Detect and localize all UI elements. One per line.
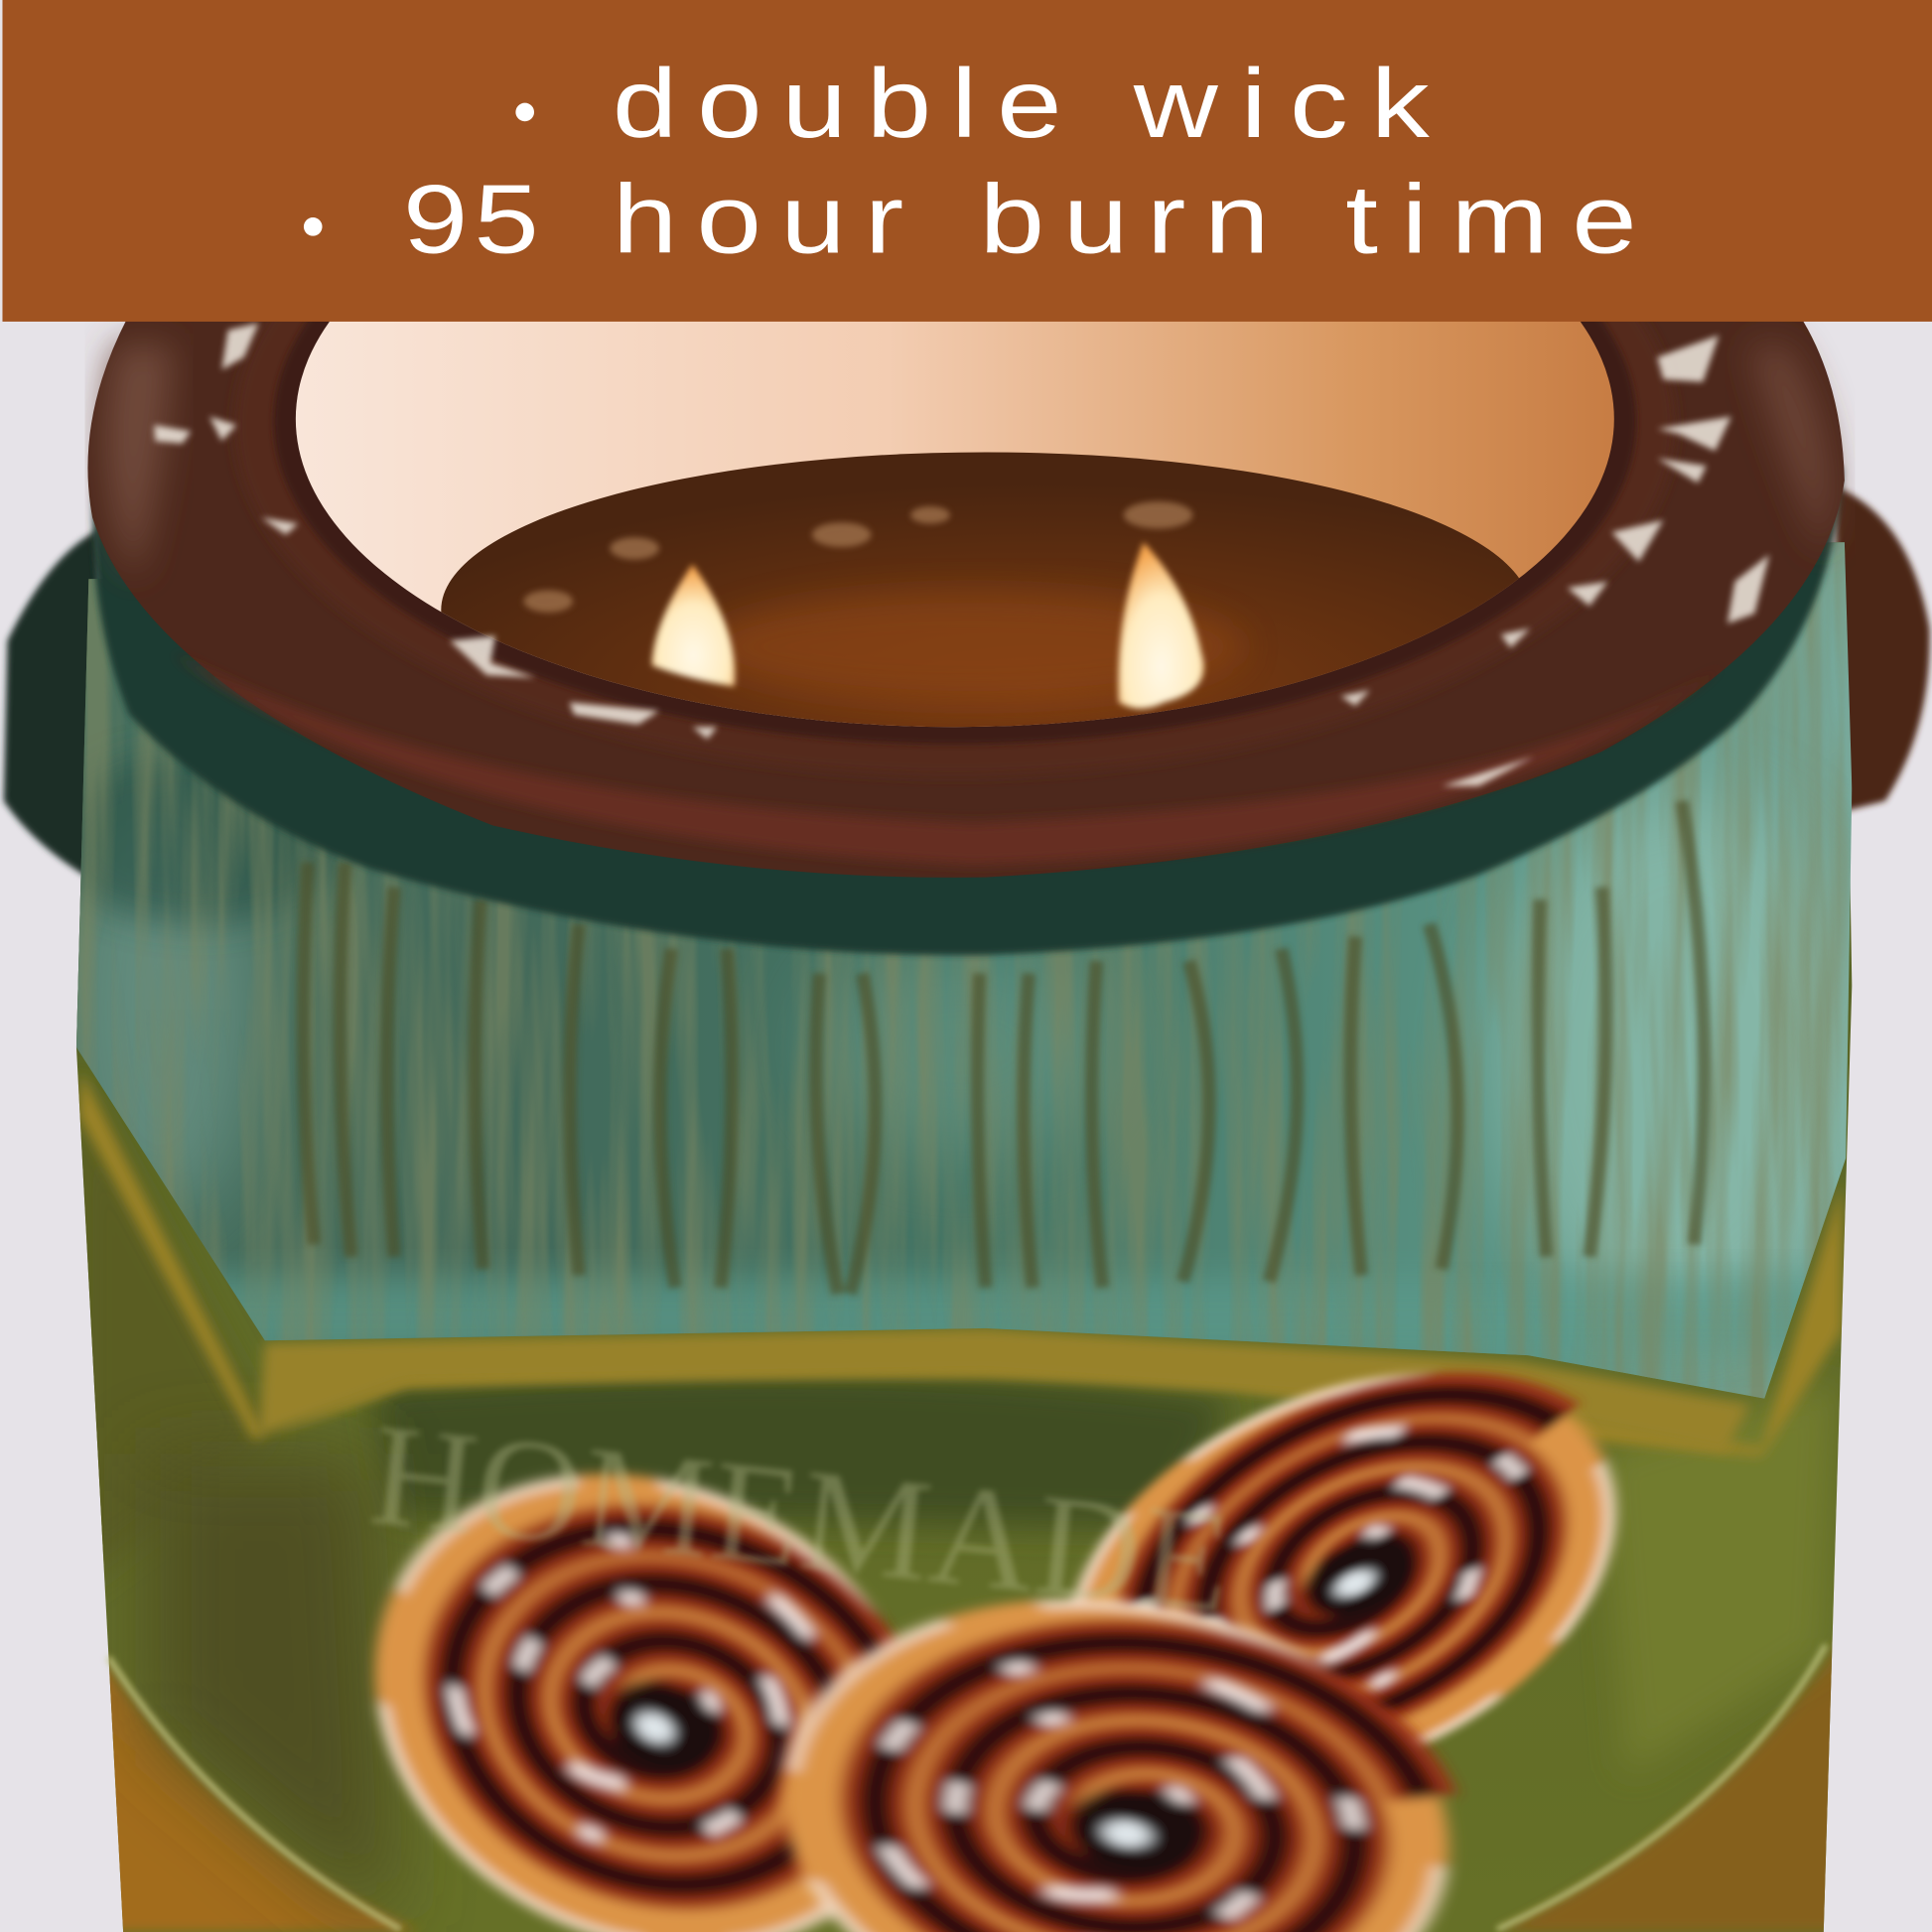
left handle lug bbox=[4, 530, 104, 888]
banner background bbox=[2, 0, 1932, 322]
chipped paint flecks on rim bbox=[154, 323, 1769, 786]
line 1: double wick bbox=[515, 49, 1431, 158]
flame right bbox=[1118, 542, 1204, 709]
vertical wood-like lettering streaks bbox=[303, 801, 1704, 1294]
arc pinstripe bbox=[108, 1645, 1826, 1930]
dark green band under rim bbox=[93, 469, 1842, 955]
line 1: double wick: wick bbox=[1133, 49, 1431, 158]
gold banner edge bbox=[78, 1072, 1842, 1456]
line 1: double wick: double bbox=[613, 49, 1062, 158]
right handle lug bbox=[1836, 486, 1930, 813]
candle opening bbox=[283, 98, 1626, 767]
wax surface bbox=[441, 452, 1530, 767]
rim highlights bbox=[173, 653, 1725, 865]
rim outer ring bbox=[87, 314, 1845, 878]
line 2: 95 hour burn time: 95 bbox=[403, 165, 539, 273]
line 2: 95 hour burn time: hour bbox=[613, 165, 903, 273]
wax bubbles bbox=[523, 501, 1192, 613]
line 2: 95 hour burn time: time bbox=[1345, 165, 1637, 273]
top banner bbox=[2, 0, 1932, 322]
teal label panel bbox=[50, 530, 1872, 1430]
flame left bbox=[652, 564, 735, 686]
can body bbox=[76, 542, 1852, 1932]
line 2: 95 hour burn time: burn bbox=[980, 165, 1270, 273]
line 2: 95 hour burn time bbox=[304, 165, 1637, 273]
faded HOMEMADE lettering: HOMEMADE bbox=[363, 1393, 1238, 1643]
inner wall bbox=[283, 98, 1626, 740]
cinnamon bun: right back bbox=[1001, 1293, 1680, 1866]
rim inner ridge bbox=[234, 73, 1676, 776]
cinnamon bun: left bbox=[296, 1386, 1003, 1932]
cinnamon bun: front bbox=[753, 1558, 1477, 1932]
lower band below the arc bbox=[73, 1072, 1849, 1932]
